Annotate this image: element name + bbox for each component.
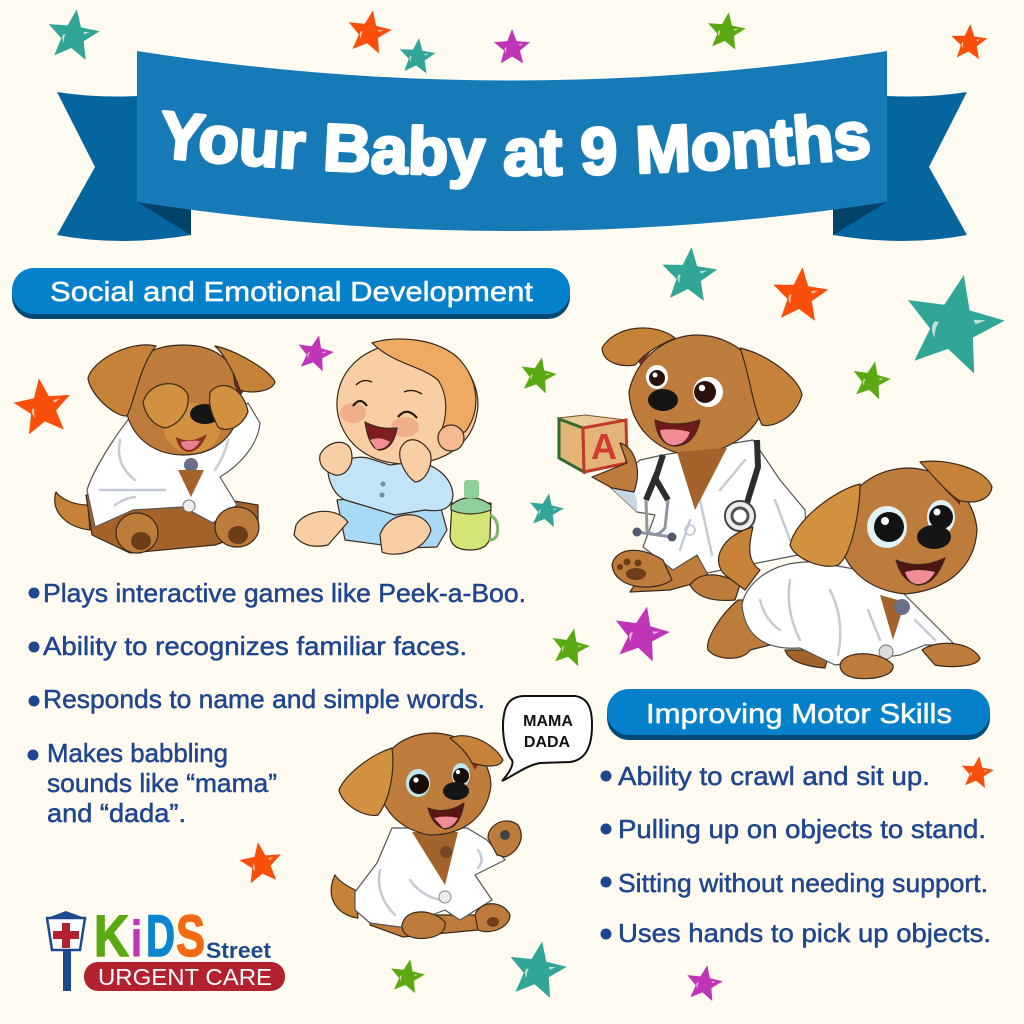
logo: Kids Street Urgent Care: K bbox=[94, 904, 129, 969]
title text: Your Baby at 9 Months bbox=[162, 110, 870, 190]
logo: Kids Street Urgent Care: Street bbox=[206, 938, 272, 963]
illustration: talking puppy with speech bubble bbox=[331, 696, 592, 938]
logo: Kids Street Urgent Care: S bbox=[176, 904, 205, 969]
bullet list: social and emotional milestones: Makes babbling bbox=[47, 738, 228, 768]
illustration: puppy playing peek-a-boo bbox=[55, 345, 275, 553]
illustration: laughing baby with sippy cup bbox=[294, 339, 498, 554]
section heading: social and emotional bbox=[12, 268, 570, 319]
bullet list: social and emotional milestones: sounds like “mama” bbox=[47, 768, 277, 798]
title banner bbox=[57, 51, 967, 241]
bullet list: motor skills: Ability to crawl and sit up. bbox=[618, 761, 930, 791]
section heading: motor skills: Improving Motor Skills bbox=[646, 698, 952, 729]
bullet list: social and emotional milestones: Responds to name and simple words. bbox=[43, 684, 485, 714]
bullet list: motor skills bbox=[600, 761, 991, 948]
speech bubble: MAMA bbox=[523, 713, 573, 730]
bullet list: motor skills: Uses hands to pick up objects. bbox=[618, 918, 991, 948]
bullet list: motor skills: Pulling up on objects to stand. bbox=[618, 814, 986, 844]
logo: Kids Street Urgent Care: D bbox=[146, 904, 175, 969]
logo: Kids Street Urgent Care: URGENT CARE bbox=[98, 964, 272, 990]
bullet list: social and emotional milestones bbox=[28, 578, 526, 828]
bullet list: motor skills: Sitting without needing support. bbox=[618, 868, 988, 898]
illustration: puppy doctor holding alphabet block bbox=[558, 328, 808, 600]
speech bubble: DADA bbox=[524, 734, 571, 751]
bullet list: social and emotional milestones: Ability to recognizes familiar faces. bbox=[43, 631, 467, 661]
alphabet block: A bbox=[591, 426, 617, 467]
speech bubble bbox=[502, 696, 592, 781]
bullet list: social and emotional milestones: and “dada”. bbox=[47, 798, 186, 828]
logo: Kids Street Urgent Care: i bbox=[131, 911, 142, 967]
section heading: motor skills bbox=[607, 689, 990, 740]
alphabet block bbox=[558, 415, 627, 472]
section heading: social and emotional: Social and Emotional Development bbox=[50, 276, 533, 307]
illustration: crawling puppy bbox=[708, 461, 992, 679]
bullet list: social and emotional milestones: Plays interactive games like Peek-a-Boo. bbox=[43, 578, 526, 608]
logo: Kids Street Urgent Care bbox=[47, 904, 285, 991]
